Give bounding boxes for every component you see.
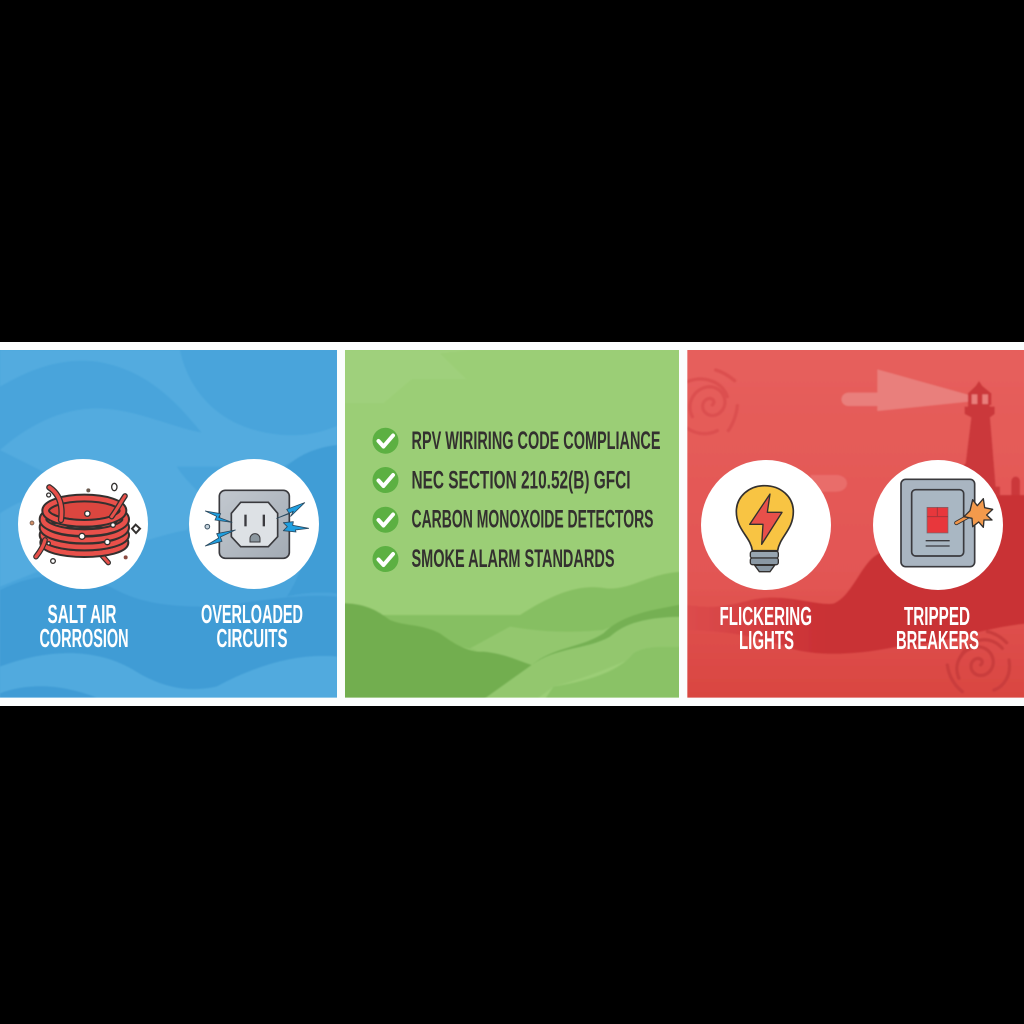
panel: blue problems <box>0 340 343 707</box>
icon: salt-corroded wire coil <box>18 459 148 589</box>
blue wave background <box>0 340 343 707</box>
checklist <box>372 427 660 573</box>
white band <box>0 342 1024 706</box>
check item 1: RPV WIRIRING CODE COMPLIANCE <box>412 427 660 455</box>
label: overloaded circuits: OVERLOADED <box>201 599 303 629</box>
red background with lighthouse <box>677 340 1024 707</box>
check item 2 <box>372 466 630 494</box>
check item 4 <box>372 545 614 573</box>
label: flickering lights <box>720 601 812 655</box>
panel: green code compliance <box>345 350 679 698</box>
label: overloaded circuits <box>201 599 303 653</box>
icon: flickering light bulb <box>701 460 831 590</box>
icon: tripped breaker panel <box>873 460 1003 590</box>
check item 3 <box>372 506 654 534</box>
lower spiral <box>947 632 1010 692</box>
label: tripped breakers <box>896 601 979 655</box>
cloud <box>811 475 847 492</box>
check item 2: NEC SECTION 210.52(B) GFCI <box>412 466 630 494</box>
label: overloaded circuits: CIRCUITS <box>216 623 288 653</box>
label: tripped breakers: TRIPPED <box>904 601 970 631</box>
label: salt air corrosion: CORROSION <box>40 623 128 653</box>
upper spiral <box>687 370 737 434</box>
lighthouse silhouette <box>964 381 1020 497</box>
check item 1 <box>372 427 660 455</box>
label: flickering lights: LIGHTS <box>739 625 794 655</box>
panel: red warning signs <box>677 340 1024 707</box>
check item 3: CARBON MONOXOIDE DETECTORS <box>412 506 654 534</box>
label: flickering lights: FLICKERING <box>720 601 812 631</box>
check item 4: SMOKE ALARM STANDARDS <box>412 545 614 573</box>
green hills background <box>345 350 679 698</box>
dark headland <box>710 553 1024 654</box>
icon: overloaded outlet <box>189 459 319 589</box>
label: salt air corrosion: SALT AIR <box>48 599 117 629</box>
lighthouse beam <box>841 369 969 411</box>
label: salt air corrosion <box>40 599 128 653</box>
